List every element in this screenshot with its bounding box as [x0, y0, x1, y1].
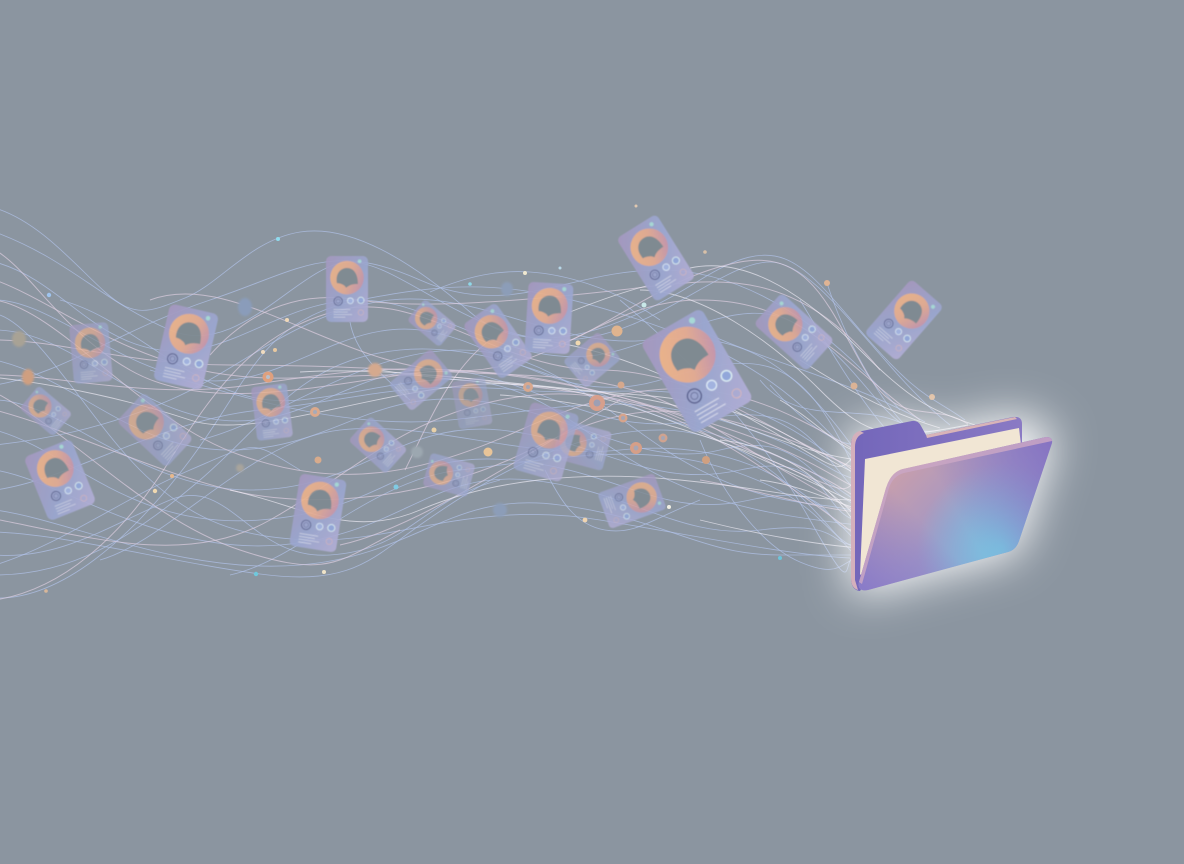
card: lower right: [597, 473, 667, 529]
card: small upper centre: [407, 299, 457, 347]
card: left large: [153, 303, 219, 391]
folder front purple shading: [859, 437, 1052, 590]
card: lower centre left: [289, 473, 347, 553]
flowing lines: white strands fanning into the folder: [0, 266, 975, 548]
card: left tilted: [116, 392, 194, 468]
card: small lower centre: [422, 453, 476, 497]
card: far right: [864, 279, 944, 361]
folder glow: [848, 414, 1056, 594]
card: small centre: [348, 416, 408, 474]
folder back: [851, 417, 1022, 591]
card: upper centre: [524, 282, 574, 354]
paper sheet: [860, 428, 1021, 575]
folder front: [859, 437, 1052, 590]
card: top: [616, 214, 696, 302]
card: centre: [462, 302, 534, 380]
card: centre lower: [512, 401, 580, 483]
card: far left lower: [23, 438, 97, 522]
card: right: [754, 293, 834, 371]
card: centre right small: [563, 331, 621, 389]
folder front blue highlight: [859, 437, 1052, 590]
card: centre left: [251, 383, 293, 441]
card: far left small: [20, 385, 72, 437]
flowing lines: pink strands: [0, 250, 968, 600]
card: left upper: [69, 322, 113, 384]
card: behind centre lower: [552, 419, 612, 471]
folder front top rim: [859, 437, 1052, 584]
flowing lines: blue strands: [0, 208, 965, 598]
folder front lower-left shading: [859, 488, 1008, 590]
particles and small dots: [12, 204, 935, 593]
card: centre tilted right: [388, 349, 454, 411]
card: hero large: [640, 308, 754, 434]
card: centre small: [451, 376, 493, 430]
folder back pink rim: [851, 431, 864, 590]
folder: [848, 414, 1056, 594]
card: upper centre left: [326, 256, 368, 322]
